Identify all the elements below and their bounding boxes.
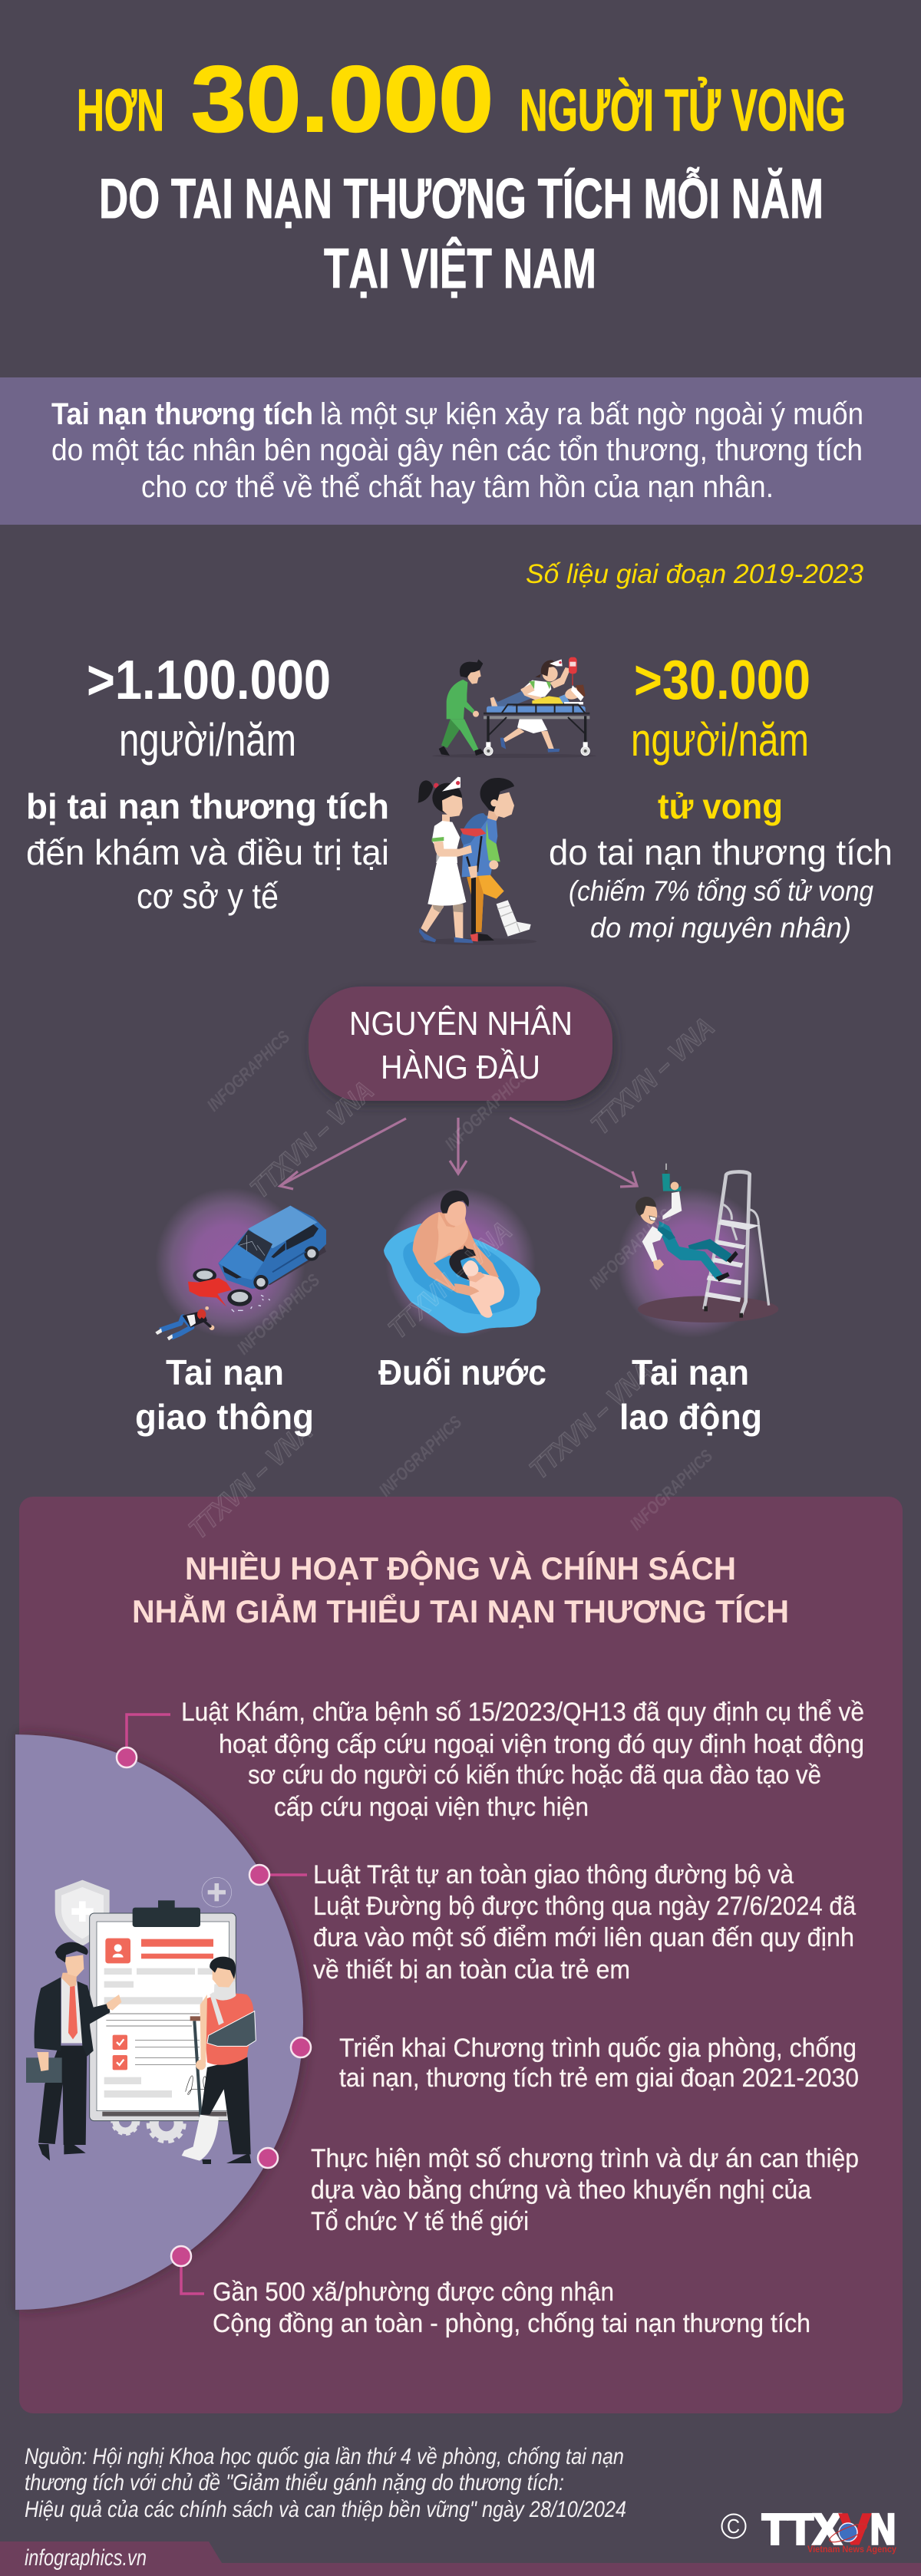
icon: workplace fall bbox=[617, 1164, 778, 1338]
panel heading: NHIỀU HOẠT ĐỘNG VÀ CHÍNH SÁCH bbox=[185, 1550, 736, 1586]
definition text bbox=[51, 397, 863, 504]
panel heading bbox=[132, 1550, 789, 1629]
text: first item: hoạt động cấp cứu ngoại viện trong đó quy định hoạt động bbox=[219, 1730, 864, 1759]
definition text: là một sự kiện xảy ra bất ngờ ngoài ý muốn bbox=[320, 397, 863, 431]
watermarks: INFOGRAPHICS bbox=[203, 1026, 294, 1115]
illustration: clipboard, doctor and injured patient bbox=[26, 1877, 256, 2164]
button: leading causes: HÀNG ĐẦU bbox=[381, 1048, 540, 1086]
stat: deaths per year bbox=[549, 650, 893, 944]
text: second item bbox=[313, 1860, 856, 1985]
text: first item bbox=[181, 1698, 864, 1822]
text: second item: Luật Đường bộ được thông qua ngày 27/6/2024 đã bbox=[313, 1892, 856, 1921]
icon: drowning bbox=[384, 1188, 540, 1338]
text: third item: Triển khai Chương trình quốc gia phòng, chống bbox=[339, 2034, 857, 2063]
title: 30.000 bbox=[191, 47, 494, 151]
connector: second item bbox=[249, 1865, 307, 1885]
stat: deaths per year: >30.000 bbox=[634, 650, 810, 711]
stat: injured per year bbox=[26, 650, 389, 916]
connector: fourth item bbox=[258, 2148, 278, 2168]
label: traffic accident bbox=[135, 1352, 314, 1437]
source note: Hiệu quả của các chính sách và can thiệp bền vững" ngày 28/10/2024 bbox=[25, 2497, 626, 2522]
watermarks: INFOGRAPHICS bbox=[585, 1204, 676, 1293]
icon: nurse helping patient on crutches bbox=[418, 777, 536, 945]
text: fourth item bbox=[311, 2144, 859, 2236]
connector: third item bbox=[291, 2037, 311, 2057]
title bbox=[77, 47, 846, 300]
button: leading causes: NGUYÊN NHÂN bbox=[349, 1005, 573, 1043]
icon: traffic accident bbox=[155, 1188, 326, 1340]
text: third item bbox=[339, 2034, 859, 2093]
stat: injured per year: cơ sở y tế bbox=[137, 876, 279, 916]
watermarks: INFOGRAPHICS bbox=[233, 1270, 324, 1359]
text: fifth item bbox=[213, 2278, 810, 2338]
watermarks: INFOGRAPHICS bbox=[375, 1412, 466, 1500]
text: fourth item: dựa vào bằng chứng và theo khuyến nghị của bbox=[311, 2176, 811, 2205]
purple half circle bbox=[15, 1734, 303, 2310]
stat: deaths per year: do mọi nguyên nhân) bbox=[590, 912, 851, 944]
label: workplace accident: Tai nạn bbox=[632, 1352, 749, 1392]
logo: TTXVN: Vietnam News Agency bbox=[807, 2544, 896, 2555]
button: leading causes bbox=[309, 987, 612, 1101]
panel heading: NHẰM GIẢM THIỂU TAI NẠN THƯƠNG TÍCH bbox=[132, 1593, 789, 1629]
text: first item: cấp cứu ngoại viện thực hiện bbox=[274, 1793, 589, 1822]
source note: thương tích với chủ đề "Giảm thiểu gánh nặng do thương tích: bbox=[25, 2470, 564, 2495]
stat: injured per year: đến khám và điều trị tại bbox=[26, 832, 389, 872]
watermarks bbox=[182, 1011, 721, 1545]
definition text: Tai nạn thương tích bbox=[51, 397, 313, 431]
watermarks: TTXVN – VNA bbox=[523, 1356, 659, 1485]
logo: TTXVN: V bbox=[840, 2505, 870, 2553]
footer bar bbox=[0, 2541, 921, 2576]
text: fifth item: Cộng đồng an toàn - phòng, chống tai nạn thương tích bbox=[213, 2309, 810, 2338]
panel: definition band bbox=[0, 377, 921, 525]
connector: fifth item bbox=[171, 2246, 204, 2294]
stat: injured per year: người/năm bbox=[119, 714, 296, 766]
source note bbox=[25, 2444, 626, 2522]
text: second item: về thiết bị an toàn của trẻ em bbox=[313, 1955, 630, 1985]
label: drowning: Đuối nước bbox=[378, 1352, 546, 1392]
label: workplace accident: lao động bbox=[619, 1397, 762, 1437]
text: first item: Luật Khám, chữa bệnh số 15/2023/QH13 đã quy định cụ thể về bbox=[181, 1698, 864, 1727]
label: traffic accident: Tai nạn bbox=[166, 1352, 284, 1392]
data period note: Số liệu giai đoạn 2019-2023 bbox=[526, 559, 864, 589]
source note: Nguồn: Hội nghị Khoa học quốc gia lần thứ 4 về phòng, chống tai nạn bbox=[25, 2444, 624, 2469]
title: HƠN bbox=[77, 77, 164, 143]
stat: deaths per year: do tai nạn thương tích bbox=[549, 832, 893, 872]
text: third item: tai nạn, thương tích trẻ em giai đoạn 2021-2030 bbox=[339, 2064, 859, 2093]
definition text: do một tác nhân bên ngoài gây nên các tổn thương, thương tích bbox=[51, 433, 863, 467]
logo: TTXVN: N bbox=[870, 2505, 896, 2553]
panel: policies bbox=[15, 1497, 903, 2413]
watermarks: INFOGRAPHICS bbox=[441, 1066, 532, 1155]
text: fourth item: Thực hiện một số chương trình và dự án can thiệp bbox=[311, 2144, 859, 2173]
watermarks: TTXVN – VNA bbox=[381, 1215, 518, 1345]
footer bar: infographics.vn bbox=[25, 2545, 147, 2571]
logo: TTXVN: C bbox=[727, 2515, 740, 2538]
definition text: cho cơ thể về thể chất hay tâm hồn của nạn nhân. bbox=[141, 470, 774, 504]
arrows to causes bbox=[280, 1118, 637, 1189]
watermarks: TTXVN – VNA bbox=[182, 1415, 319, 1545]
label: workplace accident bbox=[619, 1352, 762, 1437]
stat: deaths per year: tử vong bbox=[658, 786, 783, 826]
text: first item: sơ cứu do người có kiến thức hoặc đã qua đào tạo về bbox=[248, 1761, 821, 1790]
text: fourth item: Tổ chức Y tế thế giới bbox=[311, 2207, 529, 2236]
watermarks: TTXVN – VNA bbox=[584, 1011, 721, 1141]
connector: first item bbox=[117, 1715, 170, 1767]
text: second item: Luật Trật tự an toàn giao thông đường bộ và bbox=[313, 1860, 794, 1889]
logo: TTXVN: TTX bbox=[762, 2505, 841, 2553]
logo: TTXVN bbox=[721, 2505, 896, 2555]
icon: stretcher scene bbox=[432, 657, 596, 758]
text: fifth item: Gần 500 xã/phường được công nhận bbox=[213, 2278, 614, 2307]
stat: injured per year: >1.100.000 bbox=[87, 650, 331, 711]
watermarks: TTXVN – VNA bbox=[243, 1075, 380, 1204]
watermarks: INFOGRAPHICS bbox=[626, 1445, 717, 1534]
text: second item: đưa vào một số điểm mới liên quan đến quy định bbox=[313, 1923, 854, 1952]
stat: injured per year: bị tai nạn thương tích bbox=[26, 786, 389, 826]
label: traffic accident: giao thông bbox=[135, 1397, 314, 1437]
stat: deaths per year: (chiếm 7% tổng số tử vong bbox=[569, 875, 873, 907]
stat: deaths per year: người/năm bbox=[631, 714, 809, 766]
title: TẠI VIỆT NAM bbox=[324, 238, 596, 300]
